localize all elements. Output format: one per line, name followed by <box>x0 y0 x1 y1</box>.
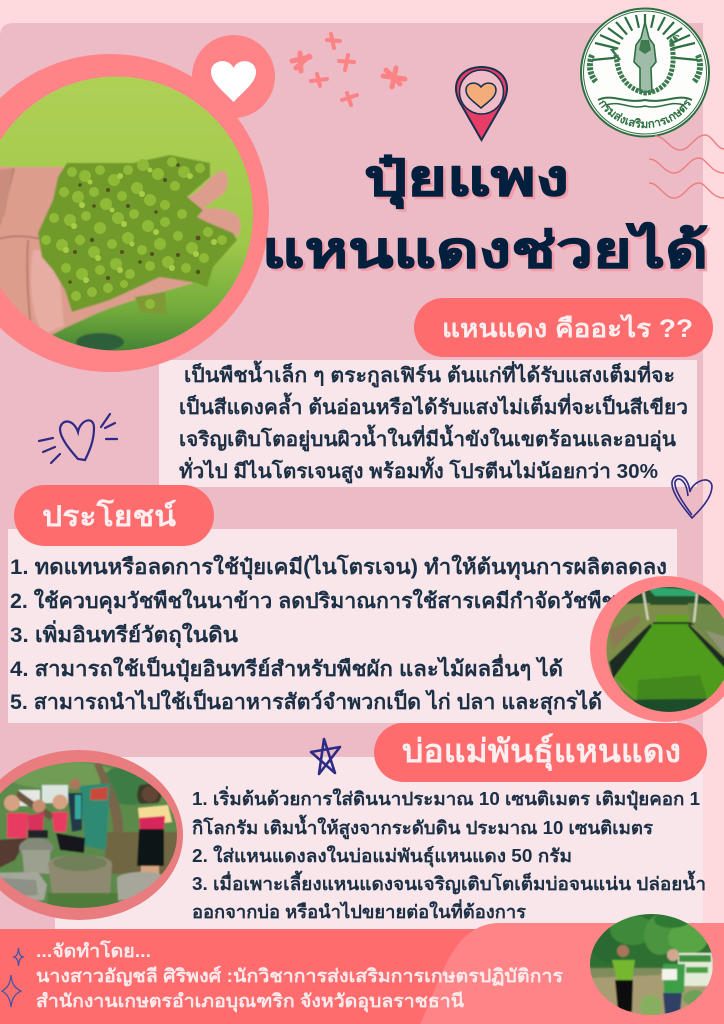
list: nursery pond steps <box>192 786 706 922</box>
list: nursery pond steps: 2. ใส่แหนแดงลงในบ่อแม่พันธุ์แหนแดง 50 กรัม <box>192 845 572 868</box>
footer band <box>0 923 724 1024</box>
heading pill: what is azolla <box>414 298 713 357</box>
text block: credits: นางสาวอัญชลี ศิริพงศ์ :นักวิชาการส่งเสริมการเกษตรปฏิบัติการ <box>36 965 563 987</box>
panel: benefits background <box>8 529 677 723</box>
panel: nursery pond background <box>55 757 703 930</box>
heading pill: benefits <box>14 485 214 546</box>
heading pill: benefits: ประโยชน์ <box>42 498 176 533</box>
list: benefits: 3. เพิ่มอินทรีย์วัตถุในดิน <box>10 619 239 649</box>
heading pill: nursery pond: บ่อแม่พันธุ์แหนแดง <box>402 733 681 772</box>
text block: credits <box>36 940 563 1013</box>
text block: azolla description: เจริญเติบโตอยู่บนผิวน้ำในที่มีน้ำขังในเขตร้อนและอบอุ่น <box>179 424 676 453</box>
text block: azolla description: ทั่วไป มีไนโตรเจนสูง พร้อมทั้ง โปรตีนไม่น้อยกว่า 30% <box>179 456 658 485</box>
photo: azolla pond <box>590 576 724 722</box>
list: benefits: 2. ใช้ควบคุมวัชพืชในนาข้าว ลดปริมาณการใช้สารเคมีกำจัดวัชพืช <box>10 588 616 615</box>
icon: doodle star <box>311 739 340 774</box>
list: benefits: 4. สามารถใช้เป็นปุ๋ยอินทรีย์สำหรับพืชผัก และไม้ผลอื่นๆ ได้ <box>10 653 563 683</box>
decorative wave lines <box>649 135 724 198</box>
text block: azolla description: เป็นสีแดงคล้ำ ต้นอ่อนหรือได้รับแสงไม่เต็มที่จะเป็นสีเขียว <box>179 392 688 419</box>
logo: Department of Agricultural Extension seal: กรมส่งเสริมการเกษตร <box>598 99 691 128</box>
heading pill: what is azolla: แหนแดง คืออะไร ?? <box>442 313 693 343</box>
text block: azolla description: เป็นพืชน้ำเล็ก ๆ ตระกูลเฟิร์น ต้นแก่ที่ได้รับแสงเต็มที่จะ <box>184 360 675 389</box>
icon: heart badge <box>192 35 275 118</box>
list: nursery pond steps: กิโลกรัม เติมน้ำให้สูงจากระดับดิน ประมาณ 10 เซนติเมตร <box>192 814 653 840</box>
text block: credits: ...จัดทำโดย... <box>36 940 151 961</box>
title: ปุ๋ยแพง <box>364 152 569 209</box>
logo: Department of Agricultural Extension seal <box>580 8 710 138</box>
text block: azolla description <box>179 360 688 485</box>
icon: location pin with heart <box>456 67 507 140</box>
text block: credits: สำนักงานเกษตรอำเภอบุณฑริก จังหวัดอุบลราชธานี <box>36 991 465 1013</box>
list: benefits <box>10 554 667 716</box>
list: nursery pond steps: ออกจากบ่อ หรือนำไปขยายต่อในที่ต้องการ <box>192 899 526 922</box>
title: แหนแดงช่วยได้ <box>262 221 708 278</box>
photo: two staff in the field <box>589 912 715 1017</box>
panel: what is azolla text background <box>159 360 697 487</box>
list: nursery pond steps: 1. เริ่มต้นด้วยการใส่ดินนาประมาณ 10 เซนติเมตร เติมปุ๋ยคอก 1 <box>192 786 700 811</box>
photo: hand holding azolla <box>0 54 269 372</box>
title: ปุ๋ยแพง <box>366 154 572 212</box>
title <box>262 152 710 280</box>
decorative coral stars <box>292 34 405 105</box>
list: benefits: 5. สามารถนำไปใช้เป็นอาหารสัตว์จำพวกเป็ด ไก่ ปลา และสุกรได้ <box>10 688 602 716</box>
icon: doodle heart right <box>672 476 712 518</box>
icon: doodle heart with rays <box>39 414 117 463</box>
icon: sparkles <box>2 948 23 1007</box>
list: nursery pond steps: 3. เมื่อเพาะเลี้ยงแหนแดงจนเจริญเติบโตเต็มบ่อจนแน่น ปล่อยน้ำ <box>192 870 706 895</box>
heading pill: nursery pond <box>374 723 707 782</box>
list: benefits: 1. ทดแทนหรือลดการใช้ปุ๋ยเคมี(ไนโตรเจน) ทำให้ต้นทุนการผลิตลดลง <box>10 554 667 581</box>
title: แหนแดงช่วยได้ <box>264 224 710 280</box>
photo: team at concrete ponds <box>0 750 183 920</box>
